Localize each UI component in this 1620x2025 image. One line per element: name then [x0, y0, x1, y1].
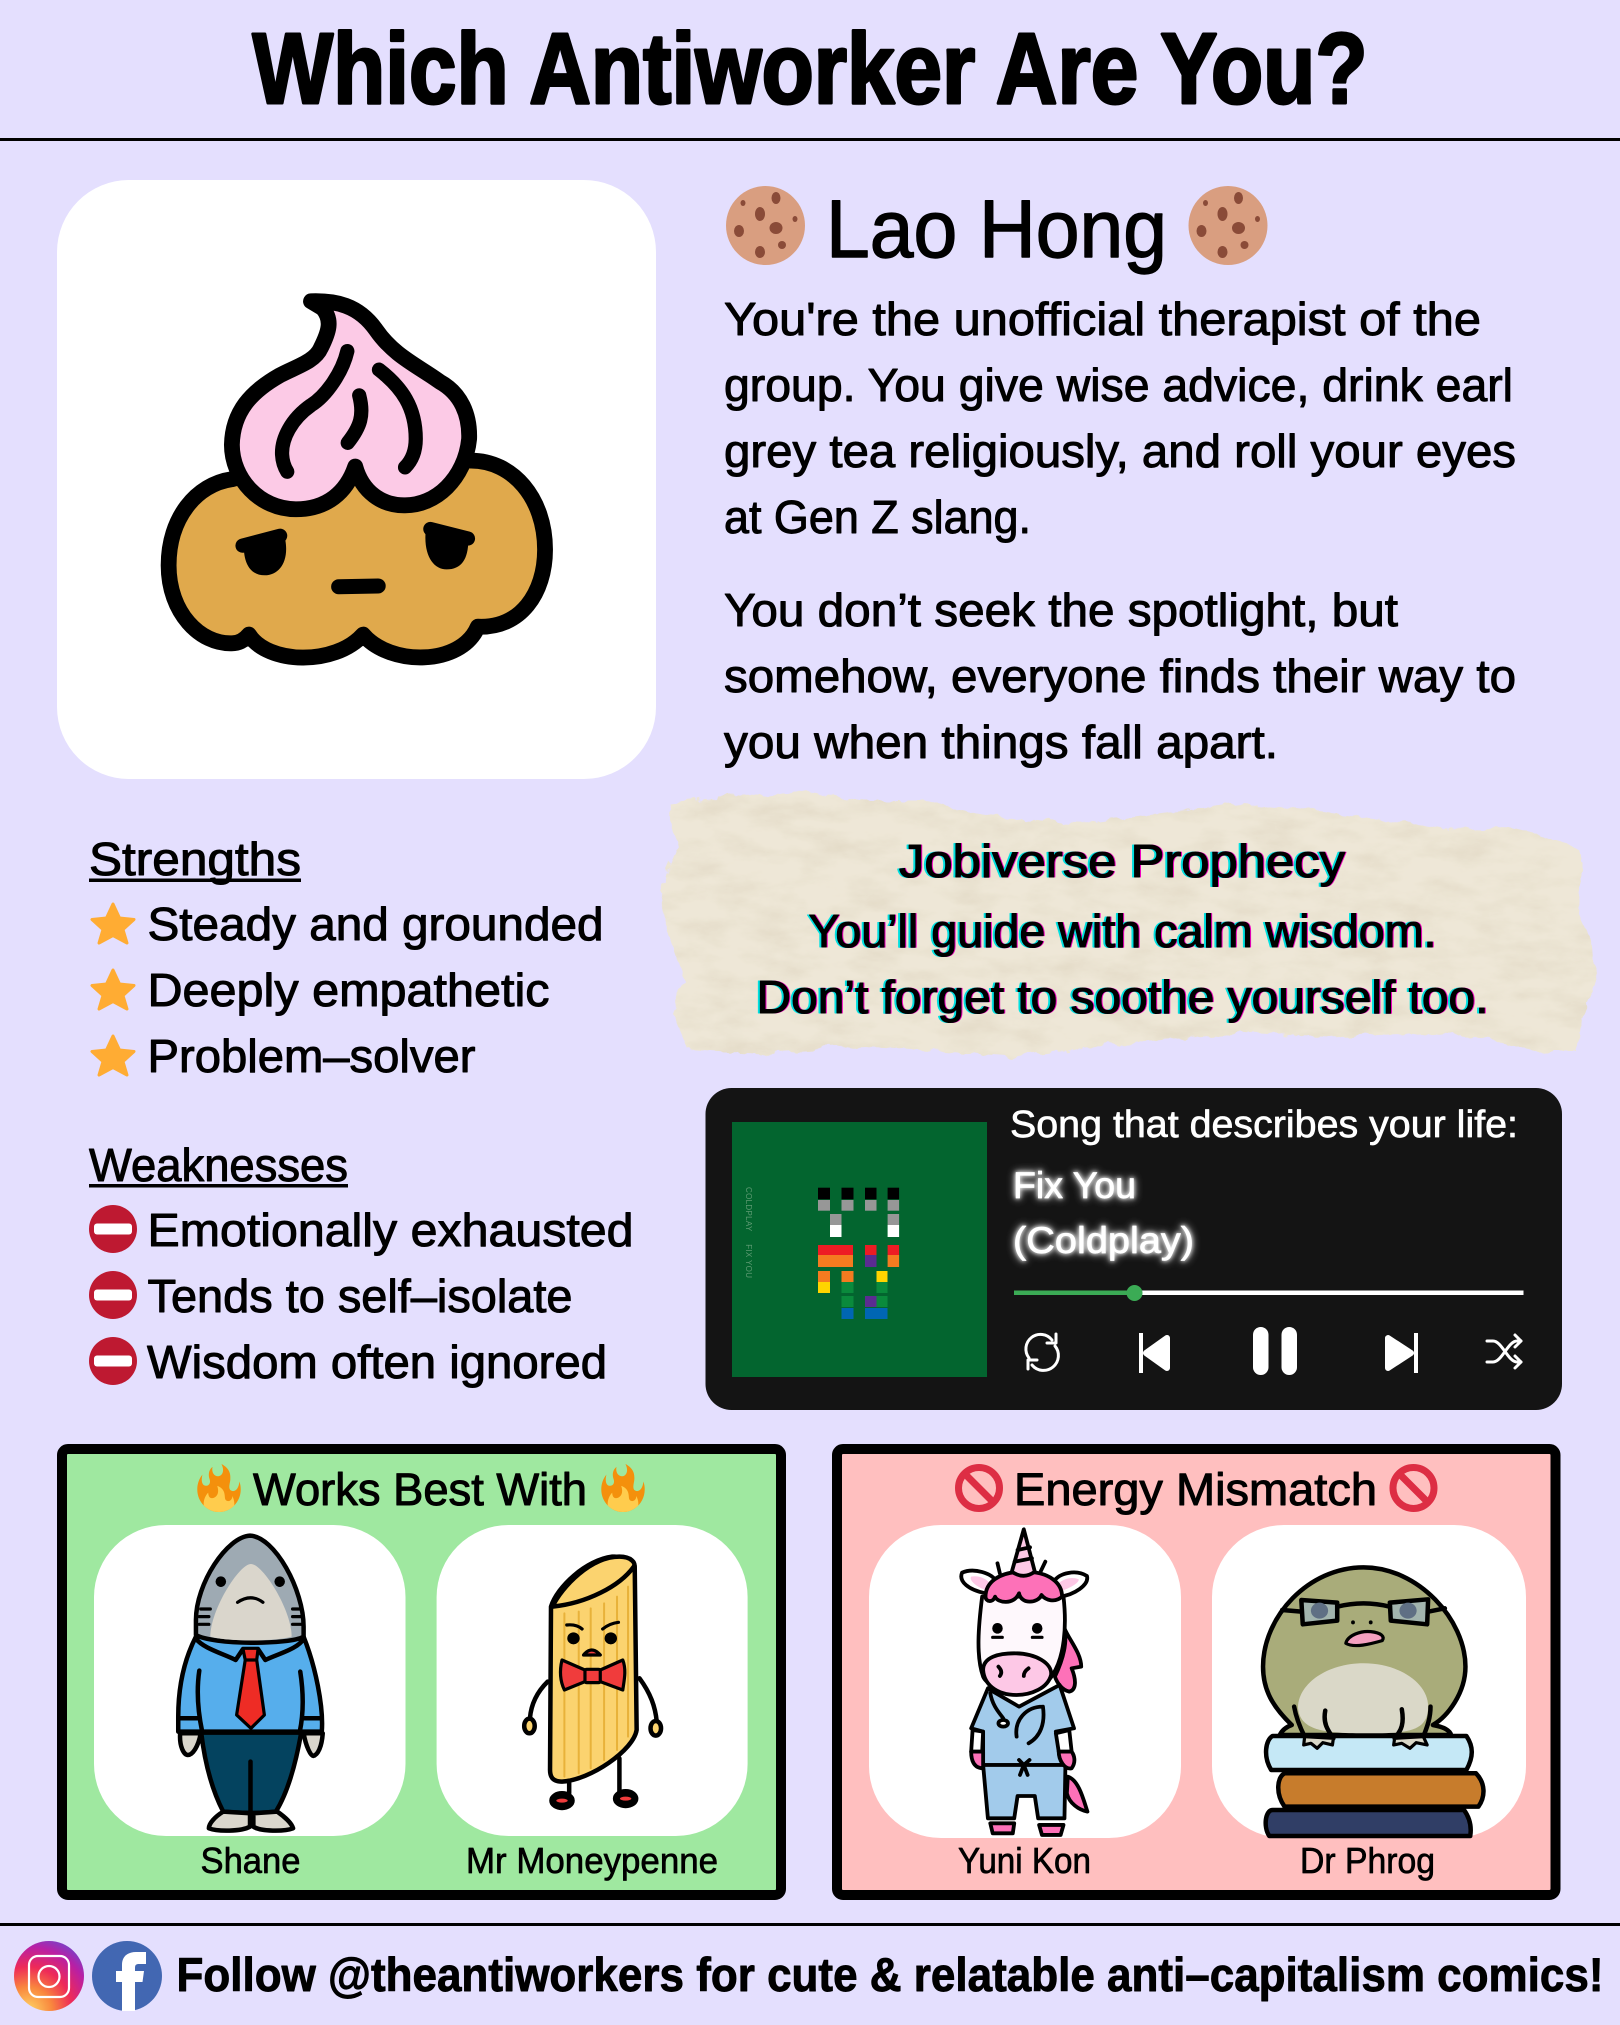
strength item: Steady and grounded: [148, 898, 604, 950]
icon: facebook: [92, 1941, 162, 2011]
icon: pause: [1253, 1327, 1297, 1375]
icon: no entry: [89, 1337, 137, 1385]
strength item: Problem–solver: [148, 1030, 476, 1082]
text block: description: at Gen Z slang.: [724, 491, 1031, 543]
text block: description: somehow, everyone finds their way to: [724, 650, 1516, 702]
panel: works best with: [62, 1449, 781, 1895]
icon: flame right: [601, 1464, 645, 1512]
card: Mr Moneypenne: [437, 1525, 748, 1881]
text block: description: you when things fall apart.: [724, 716, 1278, 768]
song title: Fix You: [1013, 1165, 1136, 1206]
weakness item: Wisdom often ignored: [147, 1336, 607, 1388]
panel: strengths: [89, 833, 604, 1082]
card: Dr Phrog: [1212, 1525, 1526, 1881]
panel: jobiverse prophecy: [659, 792, 1596, 1057]
name label: Mr Moneypenne: [466, 1840, 718, 1881]
icon: shuffle: [1487, 1335, 1521, 1368]
text block: description: grey tea religiously, and roll your eyes: [724, 425, 1516, 477]
weakness item: Emotionally exhausted: [148, 1204, 634, 1256]
icon: cookie left: [726, 186, 805, 265]
torn paper: [659, 792, 1596, 1057]
footer: [0, 1923, 1620, 2011]
icon: prohibited right: [1393, 1468, 1434, 1508]
weaknesses heading: Weaknesses: [89, 1139, 348, 1191]
card: Yuni Kon: [869, 1525, 1181, 1881]
name label: Dr Phrog: [1300, 1840, 1435, 1881]
icon: star: [92, 904, 134, 943]
name text: Lao Hong: [826, 184, 1167, 275]
song title: [1013, 1165, 1194, 1261]
prophecy text: [756, 835, 1488, 1023]
text block: description: group. You give wise advice, drink earl: [724, 359, 1513, 411]
strength item: Deeply empathetic: [148, 964, 550, 1016]
icon: instagram: [14, 1941, 84, 2011]
icon: star: [92, 970, 134, 1009]
character: shark: [178, 1536, 323, 1831]
character: unicorn: [961, 1529, 1087, 1835]
icon: previous: [1141, 1333, 1167, 1373]
prophecy text: You’ll guide with calm wisdom.: [808, 905, 1436, 957]
album cover: [732, 1122, 987, 1377]
panel heading: Energy Mismatch: [1014, 1464, 1377, 1515]
character: frog on books: [1263, 1567, 1483, 1836]
icon: no entry: [89, 1205, 137, 1253]
heading: character name: [726, 184, 1268, 275]
text block: description: [724, 293, 1516, 768]
icon: next: [1388, 1333, 1416, 1373]
song title: (Coldplay): [1013, 1220, 1194, 1261]
name label: Yuni Kon: [958, 1840, 1091, 1881]
icon: prohibited left: [958, 1468, 1000, 1508]
prophecy text: Don’t forget to soothe yourself too.: [756, 971, 1488, 1023]
title: Which Antiworker Are You?: [252, 13, 1368, 125]
icon: cookie right: [1188, 186, 1268, 265]
text block: description: You're the unofficial therapist of the: [724, 293, 1481, 345]
panel: music player: [706, 1088, 1562, 1410]
album cover: COLDPLAY FIX YOU: [744, 1187, 753, 1278]
icon: Lao Hong character: [169, 301, 545, 658]
icon: no entry: [89, 1271, 137, 1319]
progress bar: [1014, 1285, 1524, 1301]
weakness item: Tends to self–isolate: [148, 1270, 572, 1322]
name label: Shane: [200, 1840, 300, 1881]
character: penne: [524, 1557, 661, 1808]
prophecy text: Jobiverse Prophecy: [899, 835, 1345, 887]
card: Shane: [94, 1525, 406, 1881]
panel: energy mismatch: [837, 1449, 1556, 1895]
icon: flame left: [197, 1464, 241, 1512]
icon: repeat: [1026, 1334, 1058, 1370]
controls: [1026, 1327, 1521, 1375]
panel: character portrait: [57, 180, 656, 779]
strengths heading: Strengths: [89, 833, 301, 885]
panel: weaknesses: [89, 1139, 634, 1388]
icon: star: [92, 1036, 134, 1075]
text block: description: You don’t seek the spotlight, but: [724, 584, 1398, 636]
panel heading: Works Best With: [253, 1464, 587, 1515]
song caption: Song that describes your life:: [1010, 1104, 1518, 1146]
